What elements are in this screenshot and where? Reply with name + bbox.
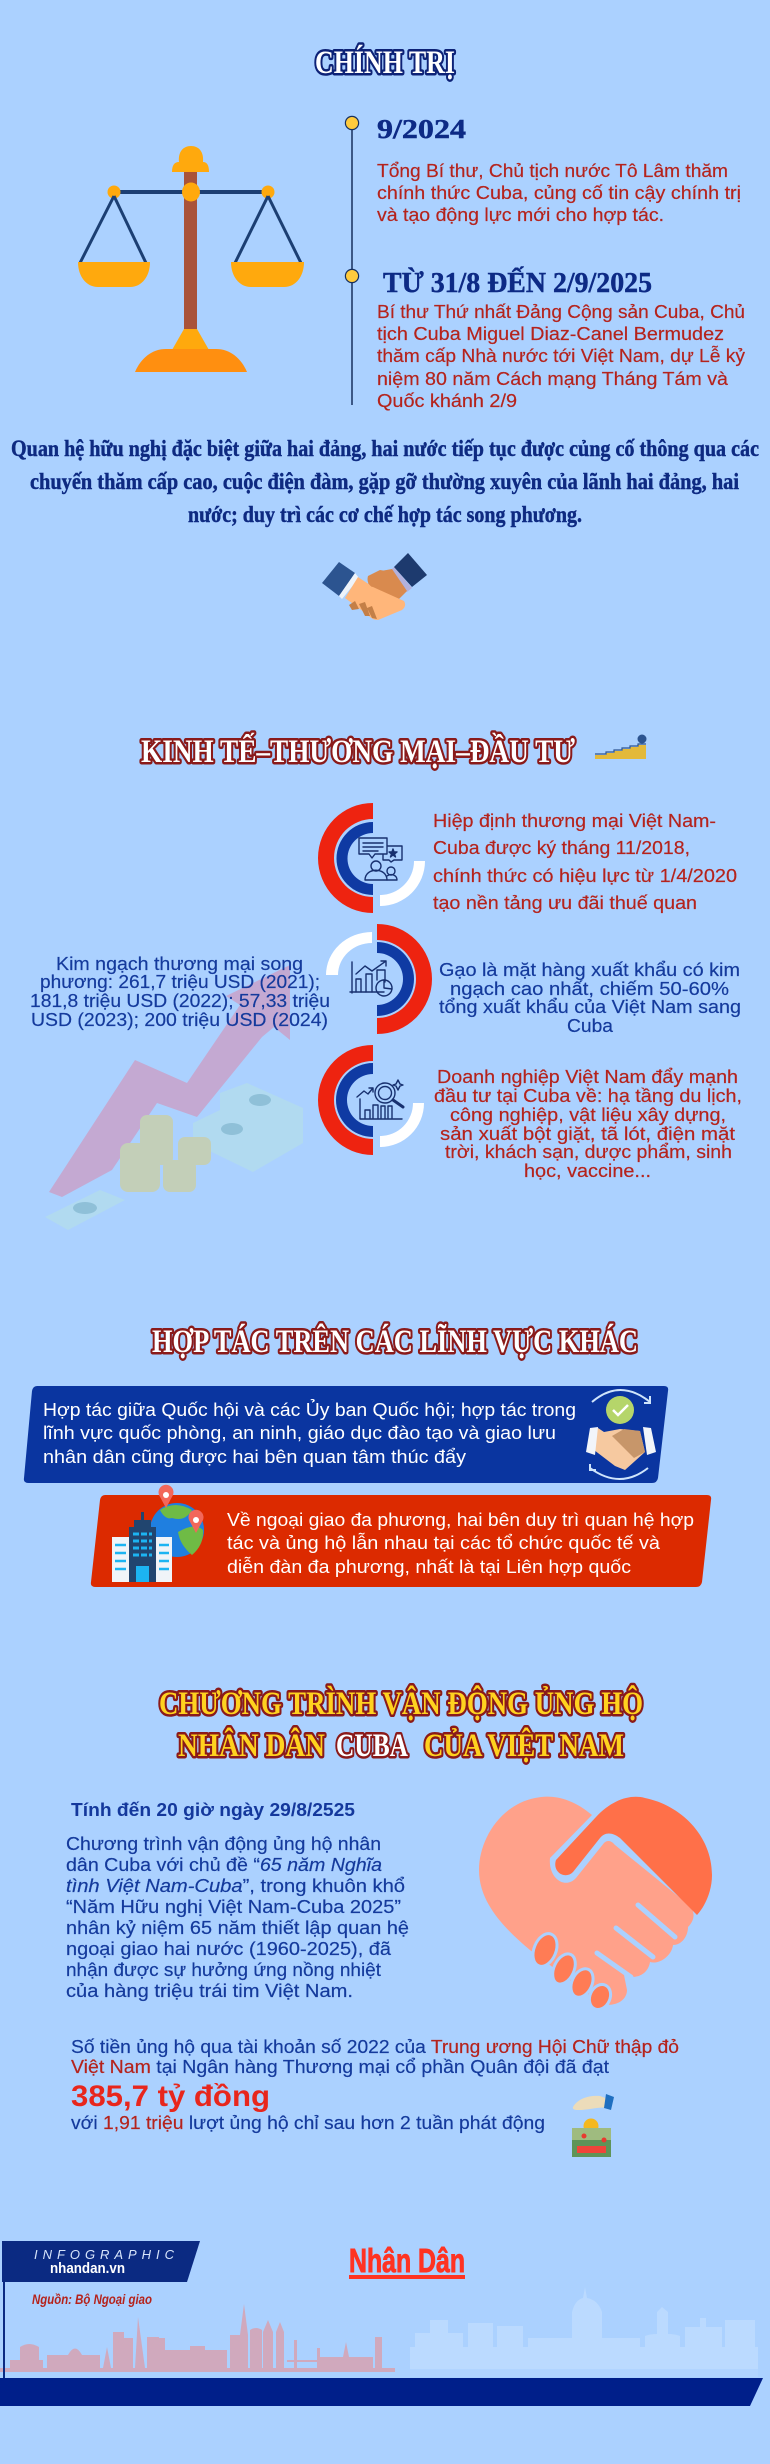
icon: handshake: [322, 553, 427, 620]
summary paragraph: [11, 436, 759, 527]
text: donation total: Số tiền ủng hộ qua tài khoản số 2022 của Trung ương Hội Chữ thập đỏ: [71, 2037, 679, 2057]
icon: heart handshake: [479, 1797, 712, 2013]
text: investment: trời, khách sạn, dược phẩm, sinh: [445, 1142, 732, 1162]
summary paragraph: nước; duy trì các cơ chế hợp tác song phương.: [188, 502, 582, 527]
icon: globe and buildings: [112, 1485, 204, 1582]
text: bilateral trade value: Kim ngạch thương mại song: [56, 954, 303, 974]
skyline: right city: [410, 2287, 758, 2377]
text: investment: Doanh nghiệp Việt Nam đẩy mạnh: [437, 1067, 738, 1087]
blue card: parliament and defence: nhân dân cũng được hai bên quan tâm thúc đẩy: [43, 1447, 466, 1467]
red card: multilateral diplomacy: diễn đàn đa phương, nhất là tại Liên hợp quốc: [227, 1556, 631, 1577]
text: trade agreement: Hiệp định thương mại Việt Nam-: [433, 811, 716, 831]
flag: infographic nhandan.vn: [2, 2241, 200, 2378]
text: campaign description: [66, 1834, 409, 2001]
timeline entry: 31/8 to 2/9/2025: niệm 80 năm Cách mạng Tháng Tám và: [377, 369, 729, 389]
text: bilateral trade value: USD (2023); 200 triệu USD (2024): [31, 1010, 328, 1030]
text: rice export: [439, 960, 741, 1036]
ring: trade agreement: [318, 803, 425, 913]
heading: politics: CHÍNH TRỊ: [315, 44, 455, 81]
text: rice export: ngạch cao nhất, chiếm 50-60%: [450, 979, 729, 999]
heading: support campaign: CUBA: [336, 1728, 408, 1764]
heading: economy trade investment: KINH TẾ–THƯƠNG MẠI–ĐẦU TƯ: [141, 731, 575, 770]
text: donation total: với 1,91 triệu lượt ủng hộ chỉ sau hơn 2 tuần phát động: [71, 2113, 545, 2133]
text: campaign description: Chương trình vận động ủng hộ nhân: [66, 1834, 381, 1854]
heading: support campaign: NHÂN DÂN: [178, 1726, 325, 1764]
text: bilateral trade value: phương: 261,7 triệu USD (2021);: [40, 972, 320, 992]
navy ribbon: [0, 2378, 763, 2406]
red card: multilateral diplomacy: [91, 1485, 711, 1587]
text: investment: [434, 1067, 742, 1181]
heading: support campaign: [159, 1684, 643, 1764]
text: campaign description: tình Việt Nam-Cuba ”, trong khuôn khổ: [66, 1876, 405, 1896]
blue card: parliament and defence: lĩnh vực quốc phòng, an ninh, giáo dục đào tạo và giao lưu: [43, 1423, 556, 1443]
icon: discussion people: [359, 838, 402, 880]
logo: Nhân Dân: Nhân Dân: [349, 2242, 465, 2279]
ring: rice export: [326, 924, 432, 1034]
timeline entry: 31/8 to 2/9/2025: TỪ 31/8 ĐẾN 2/9/2025: [383, 265, 652, 299]
timeline entry: 31/8 to 2/9/2025: Bí thư Thứ nhất Đảng Cộng sản Cuba, Chủ: [377, 302, 745, 322]
text: investment: đầu tư tại Cuba về: hạ tầng du lịch,: [434, 1086, 742, 1106]
icon: balance scale: [78, 146, 304, 372]
panel: economy section: [30, 731, 742, 1230]
timeline entry: 31/8 to 2/9/2025: Quốc khánh 2/9: [377, 391, 517, 411]
icon: investment analysis: [357, 1080, 403, 1119]
icon: handshake with check: [586, 1390, 656, 1479]
subheading: date: Tính đến 20 giờ ngày 29/8/2525: [71, 1800, 355, 1820]
text: campaign description: dân Cuba với chủ đề “ 65 năm Nghĩa: [66, 1855, 382, 1875]
text: campaign description: “Năm Hữu nghị Việt Nam-Cuba 2025”: [66, 1897, 401, 1917]
text: bilateral trade value: [30, 954, 330, 1030]
blue card: parliament and defence: Hợp tác giữa Quốc hội và các Ủy ban Quốc hội; hợp tác trong: [43, 1399, 576, 1420]
panel: footer: [0, 2241, 763, 2406]
text: trade agreement: Cuba được ký tháng 11/2018,: [433, 838, 690, 858]
panel: other fields cooperation: [24, 1322, 711, 1587]
icon: gold coin stairs: [595, 734, 646, 759]
flag: infographic nhandan.vn: INFOGRAPHIC: [34, 2247, 175, 2262]
timeline line with markers: [345, 116, 359, 405]
text: campaign description: ngoại giao hai nước (1960-2025), đã: [66, 1939, 392, 1959]
text: campaign description: của hàng triệu trái tim Việt Nam.: [66, 1981, 353, 2001]
heading: cooperation in other fields: HỢP TÁC TRÊN CÁC LĨNH VỰC KHÁC: [152, 1322, 638, 1360]
text: trade agreement: [433, 811, 737, 913]
skyline: left city: [0, 2304, 395, 2372]
timeline entry: 31/8 to 2/9/2025: [377, 265, 745, 411]
red card: multilateral diplomacy: tác và ủng hộ lẫn nhau tại các tổ chức quốc tế và: [227, 1532, 661, 1553]
text: donation total: Việt Nam tại Ngân hàng Thương mại cổ phần Quân đội đã đạt: [71, 2057, 609, 2077]
timeline entry: 9/2024: Tổng Bí thư, Chủ tịch nước Tô Lâm thăm: [377, 161, 728, 181]
text: rice export: Cuba: [567, 1016, 614, 1036]
text: investment: công nghiệp, vật liệu xây dựng,: [450, 1105, 726, 1125]
flag: infographic nhandan.vn: nhandan.vn: [50, 2260, 125, 2277]
red card: multilateral diplomacy: Về ngoại giao đa phương, hai bên duy trì quan hệ hợp: [227, 1510, 694, 1530]
heading: support campaign: CHƯƠNG TRÌNH VẬN ĐỘNG ỦNG HỘ: [159, 1684, 643, 1722]
ring: investment: [318, 1045, 424, 1155]
text: campaign description: nhận được sự hưởng ứng nồng nhiệt: [66, 1960, 381, 1980]
source note: Nguồn: Bộ Ngoại giao: [32, 2291, 152, 2307]
timeline entry: 9/2024: 9/2024: [377, 114, 466, 144]
blue card: parliament and defence: [24, 1386, 668, 1483]
timeline entry: 31/8 to 2/9/2025: tịch Cuba Miguel Diaz-Canel Bermudez: [377, 324, 724, 344]
text: trade agreement: chính thức có hiệu lực từ 1/4/2020: [433, 866, 737, 886]
panel: support campaign: [66, 1684, 712, 2157]
timeline entry: 9/2024: và tạo động lực mới cho hợp tác.: [377, 205, 664, 225]
text: trade agreement: tạo nền tảng ưu đãi thuế quan: [433, 893, 697, 913]
timeline entry: 31/8 to 2/9/2025: thăm cấp Nhà nước tới Việt Nam, dự Lễ kỷ: [377, 345, 745, 366]
text: bilateral trade value: 181,8 triệu USD (2022); 57,33 triệu: [30, 991, 330, 1011]
background illustration: arrow, coins and money: [45, 965, 303, 1230]
text: donation total: [71, 2037, 679, 2133]
panel: politics section: [11, 44, 759, 620]
timeline entry: 9/2024: [377, 114, 741, 225]
text: campaign description: nhân kỷ niệm 65 năm thiết lập quan hệ: [66, 1918, 409, 1938]
timeline entry: 9/2024: chính thức Cuba, củng cố tin cậy chính trị: [377, 183, 741, 203]
text: investment: sản xuất bột giặt, tã lót, điện mặt: [440, 1124, 735, 1144]
text: investment: học, vaccine...: [524, 1161, 651, 1181]
icon: chart with pie: [350, 961, 392, 996]
text: rice export: Gạo là mặt hàng xuất khẩu có kim: [439, 960, 740, 980]
text: rice export: tổng xuất khẩu của Việt Nam sang: [439, 997, 741, 1017]
icon: donation box: [572, 2094, 614, 2157]
text: donation total: 385,7 tỷ đồng: [71, 2080, 270, 2113]
heading: support campaign: CỦA VIỆT NAM: [424, 1726, 624, 1764]
